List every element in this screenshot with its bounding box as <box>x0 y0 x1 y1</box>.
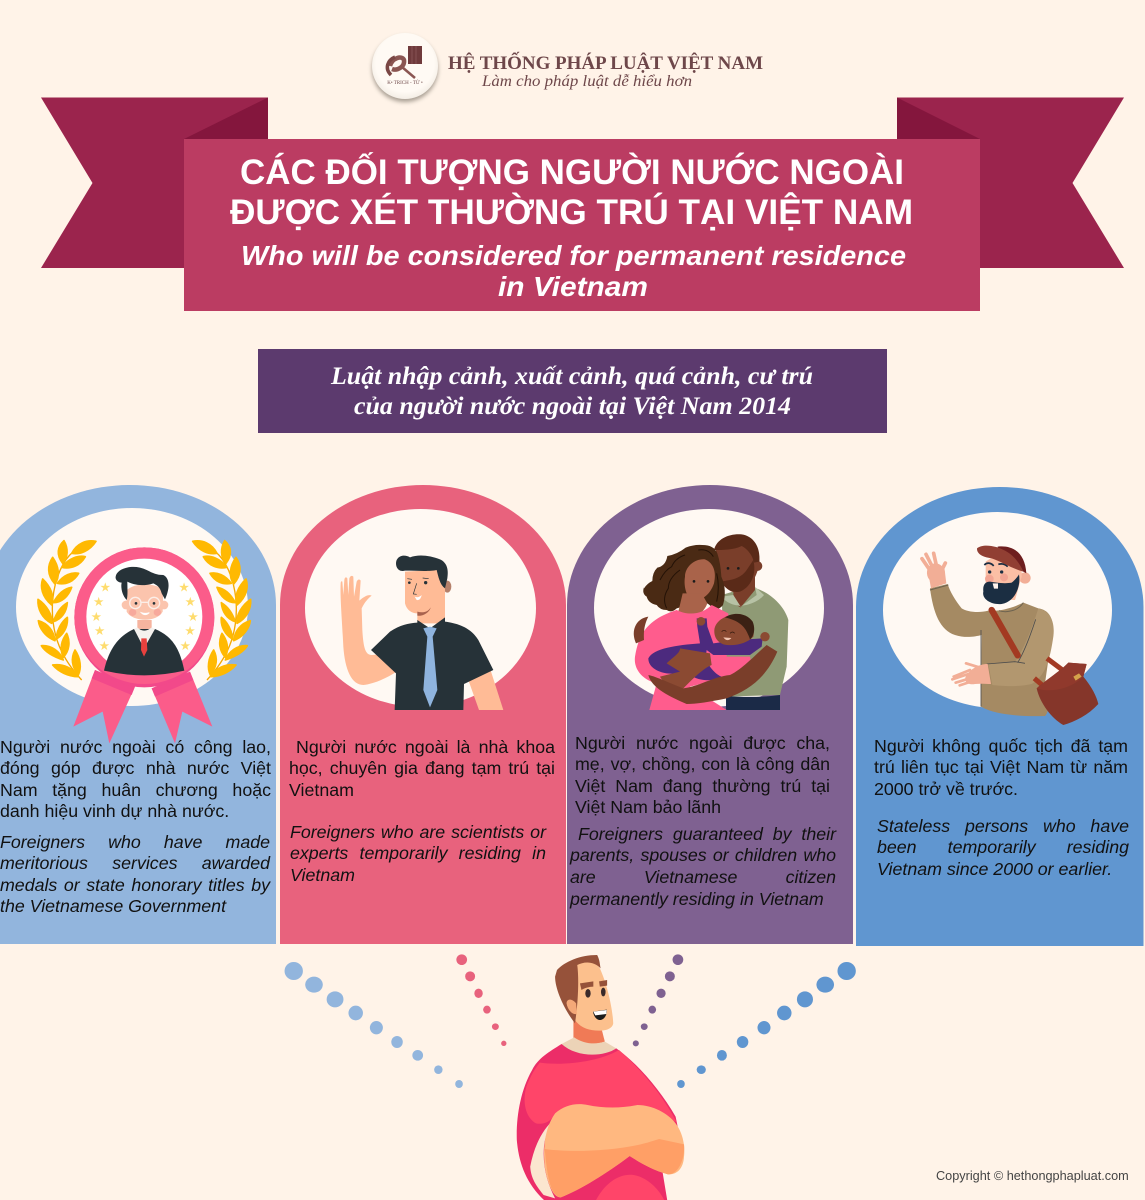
text: Vietnamese description <box>874 736 1128 798</box>
ribbon left tail <box>41 98 268 268</box>
Vietnamese title <box>230 152 913 232</box>
text: Vietnamese description: Việt Nam đang thường trú tại <box>575 776 830 796</box>
text: Vietnamese description: Việt Nam bảo lãnh <box>575 797 721 817</box>
icon: medal with man and laurel: ★ <box>93 594 104 609</box>
text: English description: parents, spouses or children who <box>570 845 836 865</box>
text: Vietnamese description: Người không quốc tịch đã tạm <box>874 736 1128 756</box>
dotted line: pink <box>456 954 506 1046</box>
panel: scientists and experts <box>280 485 566 944</box>
icon: waving man with tie <box>341 555 503 710</box>
thinking man with dotted lines <box>284 954 856 1200</box>
English subtitle: Who will be considered for permanent residence <box>241 240 906 271</box>
text: Vietnamese description: trú liên tục tại Việt Nam từ năm <box>874 757 1128 777</box>
panel: guaranteed by family <box>567 485 853 944</box>
Vietnamese title: ĐƯỢC XÉT THƯỜNG TRÚ TẠI VIỆT NAM <box>230 192 913 232</box>
panel: meritorious foreigners <box>0 485 276 944</box>
text: English description <box>570 824 837 909</box>
icon: bearded man with bag <box>922 546 1098 725</box>
text: English description: Stateless persons who have <box>877 816 1129 836</box>
text: Vietnamese description: đóng góp được nhà nước Việt <box>0 758 271 778</box>
text: English description: medals or state honorary titles by <box>0 874 270 894</box>
panel: stateless persons <box>856 487 1144 946</box>
icon: medal with man and laurel <box>38 541 251 743</box>
icon: medal with man and laurel: ★ <box>187 609 199 624</box>
law name box: Luật nhập cảnh, xuất cảnh, quá cảnh, cư trú <box>330 363 813 390</box>
dotted line: purple <box>633 954 683 1046</box>
icon: medal with man and laurel: ★ <box>178 580 190 595</box>
logo badge <box>372 33 438 102</box>
text: Vietnamese description: danh hiệu vinh dự nhà nước. <box>0 801 229 821</box>
law name box: của người nước ngoài tại Việt Nam 2014 <box>354 393 791 420</box>
illustration: man with crossed arms <box>517 955 684 1200</box>
icon: medal with man and laurel: ★ <box>180 638 191 653</box>
text: English description: Foreigners guaranteed by their <box>578 824 836 844</box>
text: English description: Foreigners who are scientists or <box>290 822 546 842</box>
law name box <box>258 349 887 433</box>
text: English description: the Vietnamese Government <box>0 896 226 916</box>
text: Vietnamese description <box>0 736 271 821</box>
site name: HỆ THỐNG PHÁP LUẬT VIỆT NAM <box>448 52 763 74</box>
text: Vietnamese description: 2000 trở về trước. <box>874 778 1018 798</box>
copyright: Copyright © hethongphapluat.com <box>936 1169 1129 1183</box>
dotted line: blue <box>677 962 856 1088</box>
text: English description: Vietnam <box>290 864 355 884</box>
text: English description: Vietnam since 2000 or earlier. <box>877 858 1112 878</box>
text: English description <box>290 822 547 884</box>
ribbon left fold <box>184 98 268 139</box>
text: Vietnamese description: Người nước ngoài có công lao, <box>0 736 271 756</box>
text: English description: permanently residing in Vietnam <box>570 889 824 909</box>
site slogan: Làm cho pháp luật dễ hiểu hơn <box>481 73 692 90</box>
ribbon main panel <box>184 139 980 311</box>
text: Vietnamese description: Người nước ngoài được cha, <box>575 732 830 752</box>
ribbon right tail <box>897 98 1124 268</box>
text: English description <box>877 816 1129 878</box>
icon: medal with man and laurel: ★ <box>185 594 196 609</box>
text: Vietnamese description: Nam tặng huân chương hoặc <box>0 780 271 800</box>
dotted line: light blue <box>285 962 463 1088</box>
text: Vietnamese description: mẹ, vợ, chồng, con là công dân <box>575 754 830 774</box>
icon: medal with man and laurel: ★ <box>94 623 105 638</box>
text: English description: been temporarily residing <box>877 837 1129 857</box>
title ribbon banner <box>41 98 1124 311</box>
icon: medal with man and laurel: ★ <box>184 623 196 638</box>
icon: medal with man and laurel: ★ <box>99 638 110 653</box>
icon: medal with man and laurel: ★ <box>91 609 102 624</box>
icon: medal with man and laurel: ★ <box>100 580 111 595</box>
text: Vietnamese description <box>575 732 830 817</box>
text: English description <box>0 832 271 916</box>
text: English description: Foreigners who have made <box>0 832 270 852</box>
text: Vietnamese description: Vietnam <box>289 780 354 800</box>
header logo and site name <box>370 33 763 104</box>
text: Vietnamese description: Người nước ngoài là nhà khoa <box>296 736 555 756</box>
English subtitle: in Vietnam <box>498 271 648 302</box>
English subtitle <box>241 240 906 302</box>
text: Vietnamese description: học, chuyên gia đang tạm trú tại <box>289 758 555 778</box>
text: English description: are Vietnamese citizen <box>570 867 836 887</box>
ribbon right fold <box>897 98 980 139</box>
text: English description: experts temporarily residing in <box>290 843 546 863</box>
text: Vietnamese description <box>289 736 555 800</box>
Vietnamese title: CÁC ĐỐI TƯỢNG NGƯỜI NƯỚC NGOÀI <box>240 152 904 192</box>
text: English description: meritorious services awarded <box>0 853 270 873</box>
icon: family with baby <box>634 534 788 710</box>
logo badge: K• TRICH - TỪ • <box>387 80 423 86</box>
